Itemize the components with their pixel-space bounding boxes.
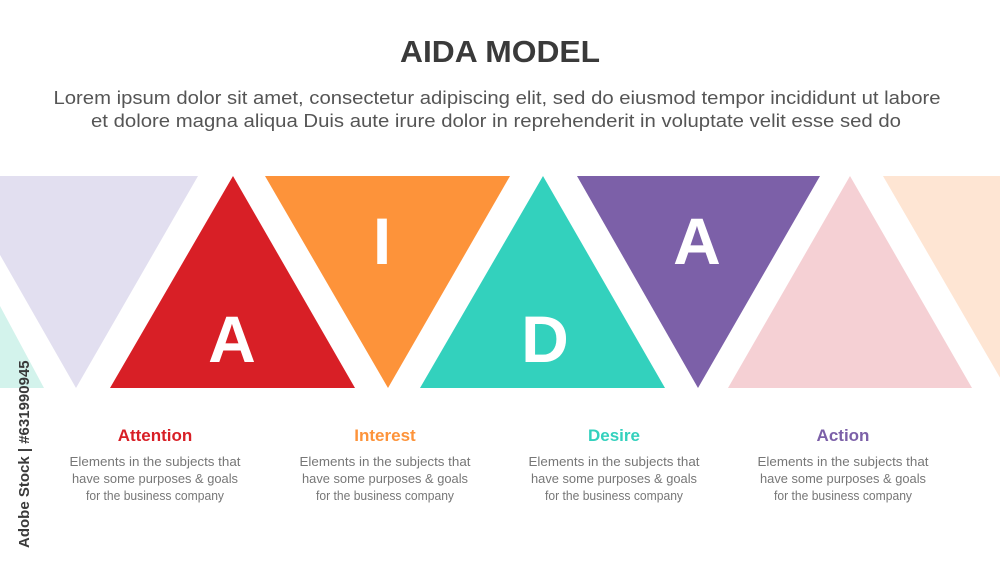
label: desire: Elements in the subjects that xyxy=(528,455,700,469)
title: AIDA MODEL xyxy=(400,34,600,69)
triangle: action purple xyxy=(577,176,820,388)
watermark vertical: Adobe Stock | #631990945 xyxy=(16,360,33,548)
label: action xyxy=(758,426,929,503)
triangle: interest orange xyxy=(265,176,510,388)
label: action: have some purposes & goals xyxy=(760,472,926,486)
label: desire xyxy=(528,426,700,503)
triangle: interest orange: I xyxy=(373,204,391,278)
label: attention: for the business company xyxy=(86,489,225,503)
triangle: attention red xyxy=(110,176,355,388)
label: action: Action xyxy=(817,426,869,445)
label: attention: have some purposes & goals xyxy=(72,472,238,486)
label: desire: Desire xyxy=(588,426,640,445)
triangle: desire teal: D xyxy=(521,302,569,376)
label: interest xyxy=(300,426,471,503)
triangle: attention red: A xyxy=(208,302,256,376)
label: interest: Interest xyxy=(354,426,416,445)
subtitle: Lorem ipsum dolor sit amet, consectetur adipiscing elit, sed do eiusmod tempor incididunt ut labore xyxy=(54,87,940,108)
decorative pink triangle xyxy=(728,176,972,388)
label: attention: Elements in the subjects that xyxy=(70,455,241,469)
decorative peach triangle xyxy=(883,176,1000,388)
label: interest: for the business company xyxy=(316,489,455,503)
subtitle xyxy=(54,87,940,131)
label: interest: Elements in the subjects that xyxy=(300,455,471,469)
label: desire: for the business company xyxy=(545,489,684,503)
label: attention: Attention xyxy=(118,426,192,445)
triangle: desire teal xyxy=(420,176,665,388)
decorative teal triangle left edge xyxy=(0,250,44,388)
label: attention xyxy=(70,426,241,503)
label: action: for the business company xyxy=(774,489,913,503)
label: action: Elements in the subjects that xyxy=(758,455,929,469)
label: desire: have some purposes & goals xyxy=(531,472,697,486)
subtitle: et dolore magna aliqua Duis aute irure dolor in reprehenderit in voluptate velit esse sed do xyxy=(91,110,901,131)
decorative lavender triangle xyxy=(0,176,198,388)
triangle: action purple: A xyxy=(673,204,721,278)
label: interest: have some purposes & goals xyxy=(302,472,468,486)
